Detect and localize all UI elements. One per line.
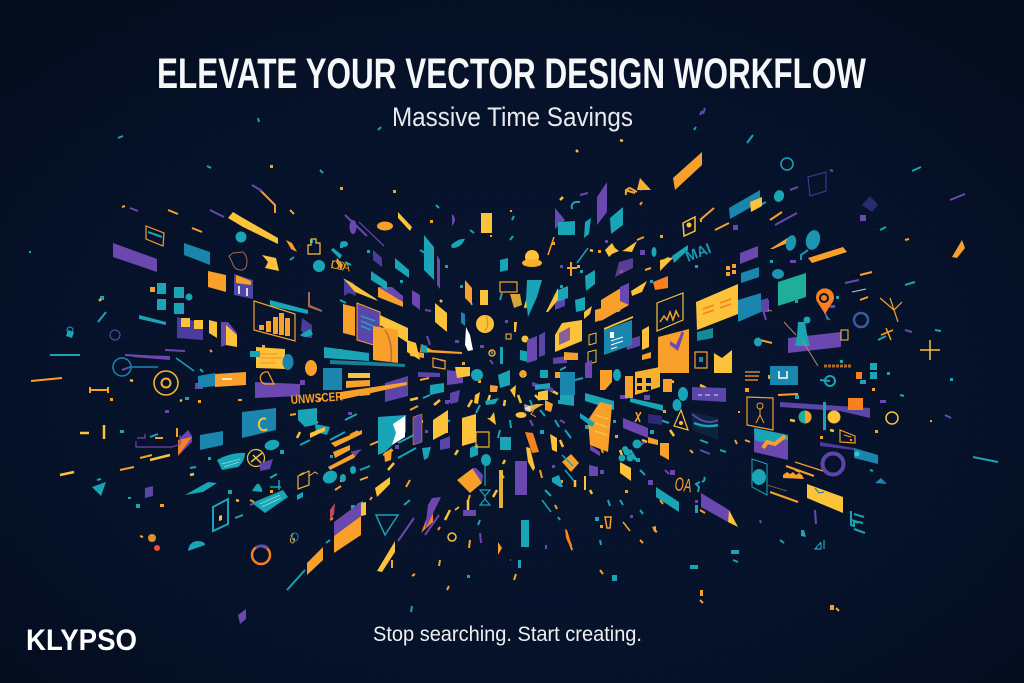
- tagline: Stop searching. Start creating.: [373, 623, 642, 646]
- right lower panels: [510, 382, 887, 551]
- vector shape burst illustration: [29, 108, 998, 624]
- right upper panels: [500, 152, 965, 398]
- left upper panels: [113, 212, 494, 363]
- subtitle: Massive Time Savings: [392, 102, 633, 132]
- text fragment: MAI: MAI: [683, 240, 714, 266]
- text fragment: OA: OA: [673, 474, 693, 497]
- logo: KLYPSO: KLYPSO: [26, 624, 137, 657]
- small scattered particles: [29, 108, 998, 624]
- text fragment: UNWSCER: UNWSCER: [290, 389, 343, 407]
- central dense fragments: [410, 258, 651, 458]
- text fragment: IODA: IODA: [329, 257, 352, 274]
- left lower panels: [92, 347, 511, 575]
